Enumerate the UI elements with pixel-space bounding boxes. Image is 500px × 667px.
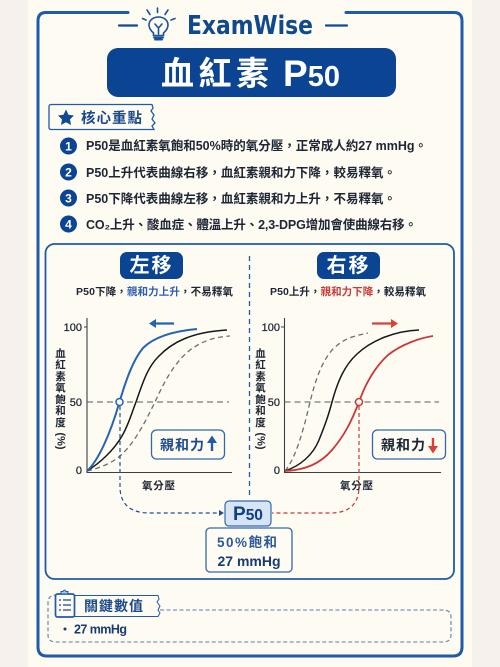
curve: normal black [87, 330, 227, 471]
left y axis label: 紅 [55, 358, 66, 371]
connector: left p50 to box [120, 406, 224, 516]
point 4: CO₂上升、酸血症、體溫上升、2,3-DPG增加會使曲線右移。 [86, 217, 417, 232]
curve: right shift red [285, 336, 433, 471]
right tick labels [262, 322, 280, 477]
left shift chart [54, 252, 234, 492]
left heading: 左移 [130, 254, 174, 277]
affinity down badge: 親和力 [381, 437, 426, 453]
section tag: key points [49, 104, 155, 130]
icon: light bulb [142, 8, 175, 40]
left axes [84, 318, 232, 472]
left y axis label [54, 347, 66, 450]
point 1: 1 [65, 140, 72, 154]
left tick labels: 50 [70, 397, 82, 409]
x label right: 氧分壓 [340, 479, 374, 492]
right shift chart [254, 252, 446, 492]
p50 value box: 50%飽和 [217, 534, 277, 550]
arrow: right [372, 319, 398, 328]
right heading [317, 252, 380, 279]
p50 box [225, 501, 271, 526]
left tick labels: 100 [64, 322, 82, 334]
left y axis label: 血 [55, 347, 66, 360]
connector: right p50 to box [272, 406, 359, 513]
right y axis label: (%) [254, 432, 266, 450]
right y axis label: 和 [255, 404, 266, 417]
point 3: 3 [65, 192, 72, 206]
affinity up badge: 親和力 [160, 437, 205, 453]
p50 marker right [356, 398, 362, 406]
brand name: ExamWise [187, 11, 313, 41]
right tick labels: 100 [262, 322, 280, 334]
key value item: 27 mmHg [74, 622, 127, 636]
p50 marker left [116, 398, 123, 406]
point 2: 2 [65, 166, 72, 180]
right y axis label: 素 [255, 370, 266, 383]
p50 value box [206, 528, 292, 572]
point 1: P50是血紅素氧飽和50%時的氧分壓，正常成人約27 mmHg。 [86, 138, 427, 153]
arrow: left [149, 319, 174, 328]
right tick labels: 0 [274, 465, 280, 477]
affinity down badge [372, 430, 446, 459]
curve: left shift blue [87, 329, 197, 471]
left y axis label: 飽 [55, 393, 66, 406]
right tick labels: 50 [268, 397, 280, 409]
left y axis label: 素 [55, 370, 66, 383]
right heading: 右移 [326, 254, 370, 277]
title [107, 48, 396, 97]
left tick labels: 0 [76, 465, 82, 477]
right y axis label: 紅 [255, 358, 266, 371]
left heading [120, 252, 183, 279]
left y axis label: (%) [54, 432, 66, 450]
section heading: 核心重點 [81, 109, 142, 127]
right y axis label: 飽 [255, 393, 266, 406]
left y axis label: 氧 [55, 381, 66, 394]
key values heading: 關鍵數值 [84, 598, 143, 614]
icon: clipboard [56, 590, 74, 617]
left y axis label: 和 [55, 404, 66, 417]
x label left: 氧分壓 [142, 479, 176, 492]
curve: reference gray dashed [285, 333, 368, 471]
title: 血紅素 [161, 55, 269, 92]
point 4: 4 [65, 218, 72, 232]
right y axis label [254, 347, 266, 450]
right y axis label: 氧 [255, 381, 266, 394]
curve: normal black [285, 330, 419, 471]
brand header [119, 8, 347, 41]
panel: oxygen dissociation curve shifts [46, 244, 454, 579]
curve: reference gray [87, 336, 230, 471]
key point list [60, 138, 427, 232]
icon: star [58, 110, 74, 125]
right axes [281, 318, 441, 472]
p50 box: P50 [233, 504, 263, 525]
right y axis label: 度 [255, 416, 266, 429]
panel: key values [48, 590, 451, 642]
key values tag [56, 590, 160, 617]
point 3: P50下降代表曲線左移，血紅素親和力上升，不易釋氧。 [86, 191, 396, 206]
right subtitle: P50上升，親和力下降，較易釋氧 [270, 285, 426, 298]
p50 value box: 27 mmHg [217, 553, 281, 569]
left subtitle: P50下降，親和力上升，不易釋氧 [76, 285, 234, 298]
title: P50 [283, 53, 340, 94]
affinity up badge [152, 430, 224, 459]
right y axis label: 血 [255, 347, 266, 360]
left y axis label: 度 [55, 416, 66, 429]
left tick labels [64, 322, 82, 477]
point 2: P50上升代表曲線右移，血紅素親和力下降，較易釋氧。 [86, 165, 396, 180]
